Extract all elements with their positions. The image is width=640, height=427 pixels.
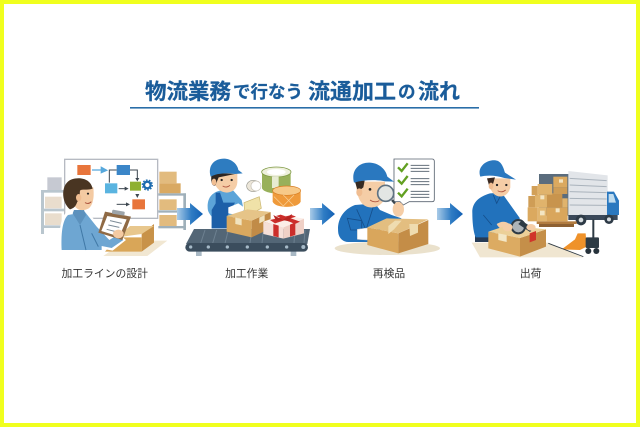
panel: line design — [41, 159, 186, 256]
worker — [472, 160, 520, 242]
title: 物流業務 — [145, 80, 231, 104]
pallet jack — [562, 219, 599, 254]
right shelf with boxes — [158, 172, 186, 230]
orange roll — [273, 186, 301, 207]
title: 流通加工 — [308, 80, 396, 104]
label: processing work: 加工作業 — [225, 267, 268, 280]
checklist bubble — [394, 159, 434, 205]
title: 流れ — [418, 80, 460, 104]
arrow 3 — [437, 203, 463, 225]
cardboard box with tape — [488, 225, 546, 257]
worker — [338, 163, 402, 242]
panel: processing work — [185, 159, 310, 256]
title: で行なう — [233, 82, 303, 102]
package held — [244, 197, 261, 215]
floor — [335, 242, 440, 255]
label: line design: 加工ラインの設計 — [62, 267, 148, 280]
arrow 1 — [177, 203, 203, 225]
green tape roll — [262, 167, 291, 193]
cardboard box — [227, 209, 271, 237]
title — [145, 80, 460, 104]
worker — [208, 159, 244, 228]
label: re-inspection: 再検品 — [373, 266, 405, 280]
tape dispenser and hands — [503, 220, 536, 233]
label: shipping: 出荷 — [520, 267, 542, 280]
conveyor — [185, 229, 310, 256]
floor shadow and box — [103, 224, 167, 256]
panel: shipping — [472, 160, 619, 257]
arrow 2 — [310, 203, 335, 225]
white roll — [247, 180, 261, 192]
title: の — [398, 82, 416, 102]
truck — [539, 171, 619, 225]
gift box — [263, 214, 304, 239]
left shelf — [41, 177, 64, 234]
panel: re-inspection — [335, 159, 440, 255]
cardboard box — [367, 218, 428, 253]
magnifier — [378, 185, 404, 217]
box stack on pallet — [528, 177, 577, 227]
table — [472, 243, 583, 257]
title underline — [130, 107, 479, 109]
whiteboard flowchart — [65, 159, 158, 218]
worker with clipboard — [59, 178, 131, 252]
